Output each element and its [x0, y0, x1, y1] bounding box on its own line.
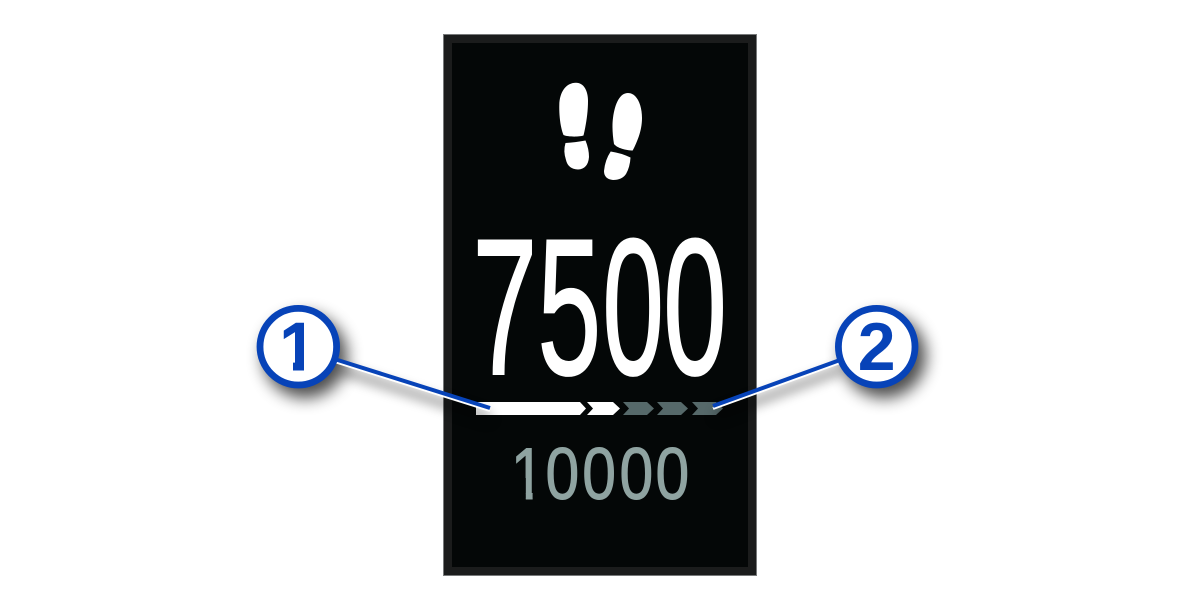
device screen frame	[444, 34, 756, 576]
infographic: step counter device screen with callouts	[251, 34, 938, 576]
icon: footprints	[559, 83, 642, 180]
current step count	[472, 198, 727, 416]
step goal: 1	[511, 434, 545, 515]
step goal: 0	[656, 434, 689, 515]
step goal: 0	[582, 434, 616, 515]
step goal: 0	[546, 434, 579, 515]
callout 1	[260, 308, 490, 418]
callout 2: 2	[858, 309, 896, 385]
callout 1: 1	[280, 309, 317, 385]
current step count: 0	[663, 199, 727, 415]
callout 2	[713, 308, 926, 416]
current step count: 7	[472, 198, 537, 415]
progress bar: completed segment	[476, 402, 620, 415]
progress bar: remaining segments	[623, 402, 723, 415]
current step count: 5	[538, 199, 601, 415]
step goal	[516, 447, 688, 500]
step goal: 0	[620, 434, 653, 515]
progress bar	[476, 402, 723, 415]
current step count: 0	[602, 200, 664, 416]
